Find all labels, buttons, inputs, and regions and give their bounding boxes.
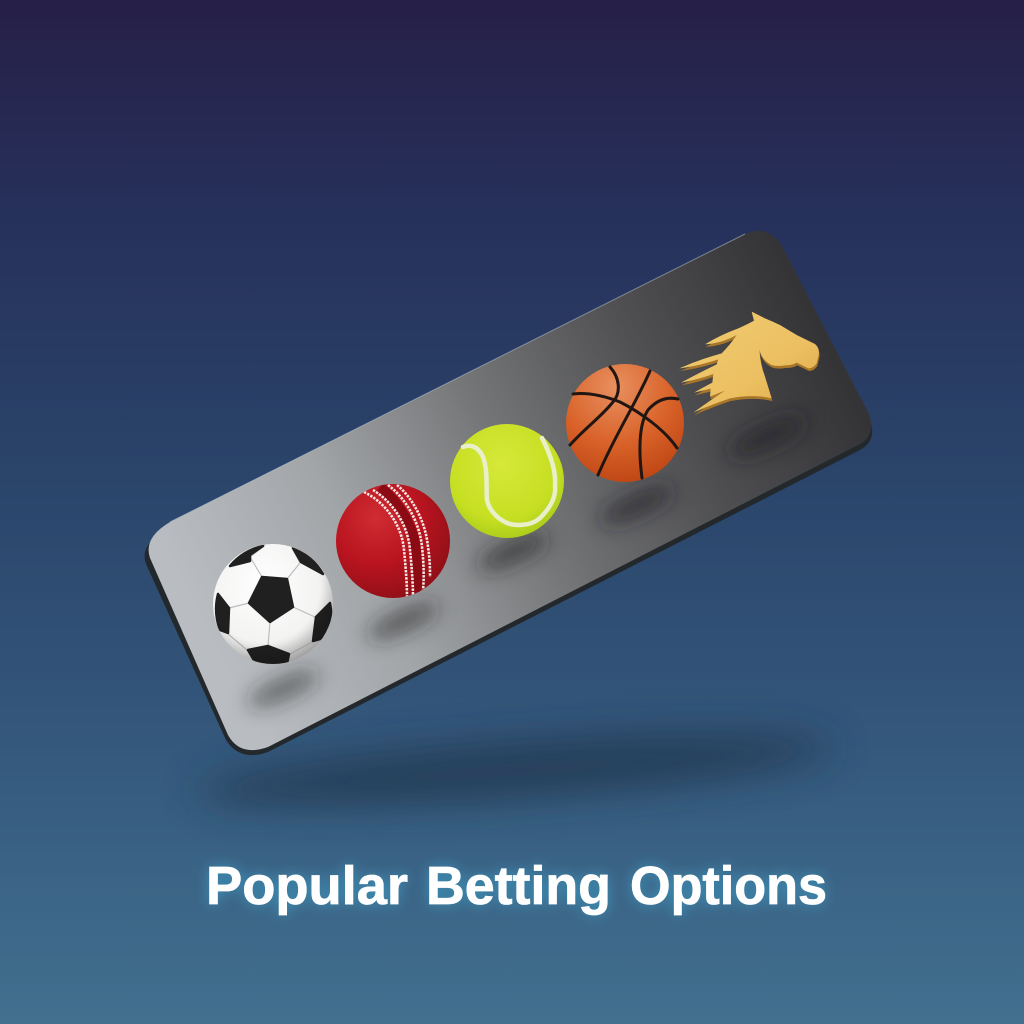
ball shadows	[244, 410, 810, 714]
icon: soccer ball	[213, 544, 333, 666]
title glow: Options	[630, 856, 827, 916]
panel surface	[149, 231, 871, 750]
icon: cricket ball	[336, 484, 450, 598]
panel edge	[145, 236, 872, 755]
title	[206, 856, 827, 916]
icon: golden horse head	[679, 312, 820, 415]
panel: tilted board	[145, 231, 872, 755]
floor shadow	[194, 720, 836, 820]
title glow	[206, 856, 827, 916]
title: Betting	[426, 856, 611, 916]
title glow: Betting	[426, 856, 611, 916]
icon: tennis ball	[450, 424, 564, 538]
title: Popular	[206, 856, 408, 916]
title: Options	[630, 856, 827, 916]
title glow: Popular	[206, 856, 408, 916]
icon: basketball	[566, 364, 684, 482]
